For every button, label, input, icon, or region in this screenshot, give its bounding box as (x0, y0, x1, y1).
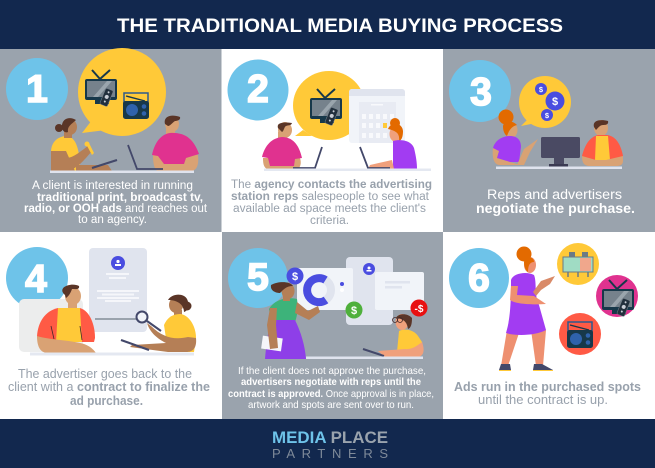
text: step 1: A client is interested in running (32, 180, 193, 192)
text: step 2: available ad space meets the client's (233, 203, 426, 215)
speech bubble with tv (293, 71, 365, 140)
icon: dollar coin: $ (292, 271, 298, 283)
table (50, 170, 194, 173)
speech bubble with coins: $ (552, 96, 558, 108)
text: step 6: Ads run in the purchased spots (454, 379, 641, 394)
speech bubble with coins: $ (539, 85, 544, 94)
person: client in yellow (51, 118, 117, 171)
number badge 2 (228, 60, 288, 120)
text: step 5: advertisers negotiate with reps until the (241, 376, 421, 388)
panel: step 4 (0, 232, 222, 419)
text: step 5 (228, 365, 434, 411)
contract document (89, 248, 147, 332)
right card (375, 272, 424, 310)
text: step 3: Reps and advertisers (487, 187, 622, 202)
text: step 4 (8, 366, 210, 408)
text: step 4: ad purchase. (70, 393, 143, 408)
logo wordmark (272, 428, 388, 461)
number badge 6: 6 (468, 257, 490, 300)
person: woman presenting (261, 282, 320, 359)
logo wordmark: MEDIA PLACE (272, 428, 388, 447)
text: step 3 (476, 187, 635, 216)
table (496, 166, 622, 169)
text: step 3: negotiate the purchase. (476, 201, 635, 216)
magnifying glass (136, 312, 161, 331)
text: step 2: The agency contacts the advertising (231, 179, 432, 191)
number badge 5: 5 (247, 256, 269, 299)
footer (0, 419, 655, 468)
number badge 3: 3 (470, 71, 492, 114)
media circle: tv (596, 275, 638, 317)
media circle: billboard (557, 243, 599, 285)
icon: dollar coin (286, 268, 304, 284)
icon: green dollar coin (346, 302, 362, 318)
person: agency in pink (262, 122, 322, 170)
person: agency in pink (128, 116, 199, 171)
icon: green dollar coin: $ (351, 305, 357, 317)
number badge 1: 1 (26, 68, 48, 111)
panel: step 3 (443, 49, 655, 232)
back document (19, 299, 83, 352)
text: step 5: If the client does not approve the purchase, (238, 365, 426, 377)
text: step 4: The advertiser goes back to the (18, 366, 192, 381)
number badge 1 (6, 58, 68, 120)
media circle: radio (559, 313, 601, 355)
text: step 5: contract is approved. Once approval is in place, (228, 388, 434, 400)
text: step 5: artwork and spots are sent over to run. (248, 399, 414, 411)
person: client in yellow (121, 295, 196, 352)
calendar (349, 89, 405, 143)
text: step 1: to an agency. (78, 214, 147, 226)
panel: step 2 (222, 49, 443, 232)
number badge 4: 4 (25, 258, 47, 301)
logo wordmark: PARTNERS (272, 446, 388, 461)
number badge 6 (449, 248, 509, 308)
person: woman with red hair (499, 246, 555, 371)
icon: profile coin (363, 263, 375, 275)
icon: minus dollar coin (410, 300, 428, 316)
text: step 2: criteria. (310, 215, 349, 227)
speech bubble with media icons (78, 48, 166, 136)
number badge 5 (228, 248, 288, 308)
table (306, 356, 423, 359)
person: advertiser in red jacket (37, 285, 96, 353)
speech bubble with coins: $ (545, 111, 550, 120)
number badge 2: 2 (247, 68, 269, 111)
text: step 2: station reps salespeople to see what (231, 191, 430, 203)
text: step 1: radio, or OOH ads and reaches out (24, 203, 208, 215)
person: rep with red hair (493, 110, 538, 165)
back document (346, 257, 393, 325)
panel: step 5 (222, 232, 443, 419)
person: advertiser in red jacket (582, 120, 623, 166)
text: step 1 (24, 180, 208, 226)
text: step 1: traditional print, broadcast tv, (37, 192, 203, 204)
number badge 4 (6, 247, 68, 309)
panel: step 1 (0, 48, 222, 232)
person: reviewer with glasses (363, 314, 424, 357)
title banner (0, 0, 655, 49)
text: step 4: client with a contract to finalize the (8, 379, 210, 394)
table (30, 352, 194, 356)
number badge 3 (449, 60, 511, 122)
text: step 6: until the contract is up. (478, 392, 608, 407)
table (264, 168, 431, 171)
person: rep with red hair (360, 118, 417, 169)
panel: step 6 (443, 232, 655, 419)
donut chart card (297, 268, 353, 310)
text: step 2 (231, 179, 432, 227)
title: THE TRADITIONAL MEDIA BUYING PROCESS (117, 15, 563, 37)
speech bubble with coins (519, 76, 571, 128)
monitor (541, 137, 580, 166)
text: step 6 (454, 379, 641, 407)
icon: minus dollar coin: -$ (415, 304, 424, 315)
